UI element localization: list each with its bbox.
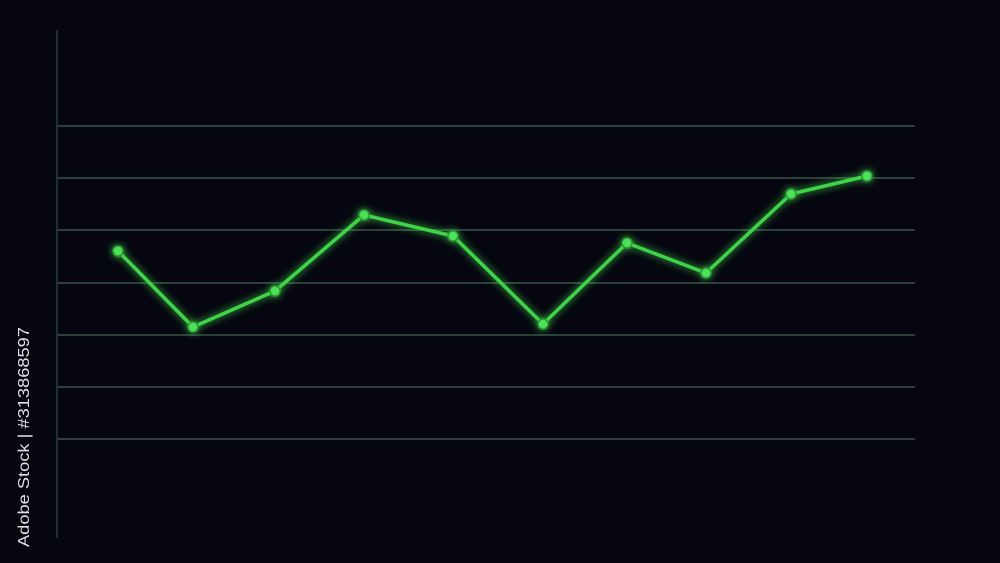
stock id text: Adobe Stock | #313868597	[16, 327, 33, 547]
axis: vertical	[56, 30, 58, 538]
data line	[113, 171, 872, 332]
